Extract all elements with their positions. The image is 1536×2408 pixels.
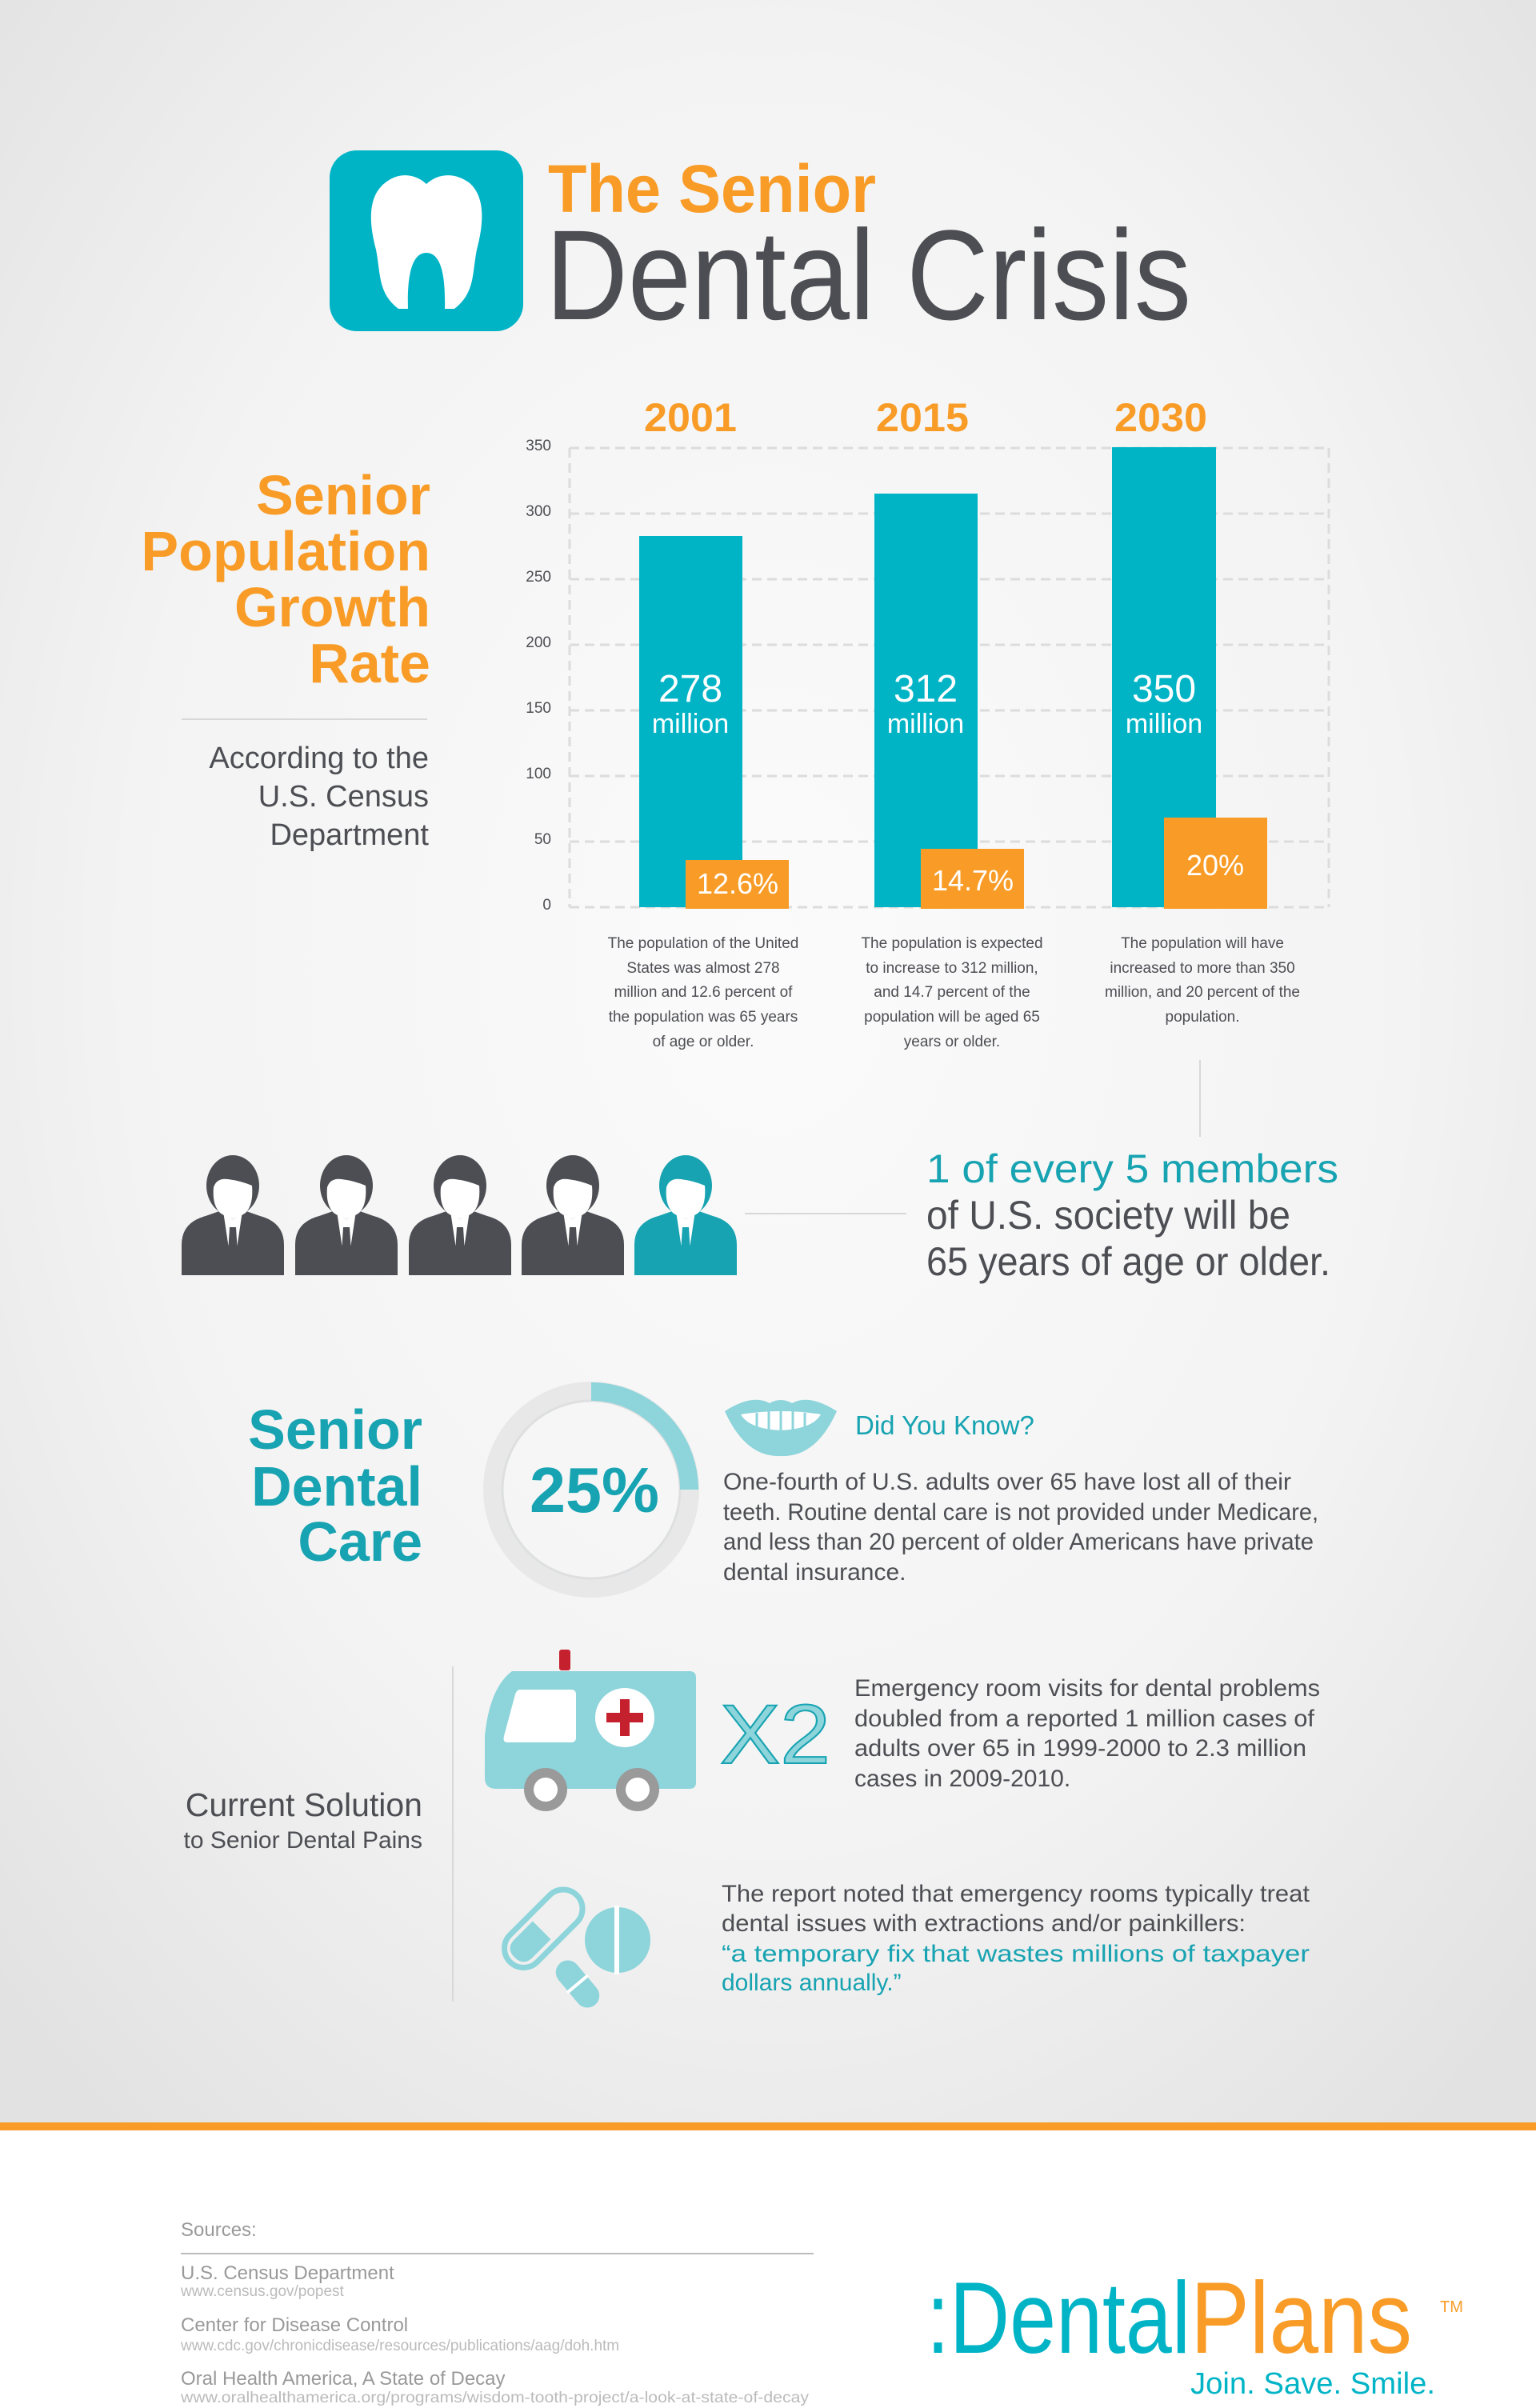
bar chart: 100 [526,766,551,782]
title: The Senior [548,151,876,226]
text: emergency paragraph: cases in 2009-2010. [854,1766,1070,1792]
bar chart: 2001 [644,395,737,440]
text: bar descriptions: million, and 20 percent of the [1105,984,1300,1001]
text: emergency paragraph: doubled from a reported 1 million cases of [854,1706,1315,1732]
heading: senior dental care: Dental [251,1455,422,1518]
text: did you know paragraph: One-fourth of U.S. adults over 65 have lost all of their [723,1469,1291,1495]
donut chart 25%: 25% [530,1454,659,1526]
donut chart 25% [493,1382,698,1588]
heading: senior population growth rate: Rate [309,632,430,694]
bar chart: 2015 [876,395,969,440]
heading: senior population growth rate [141,464,430,694]
callout: 1 of every 5: of U.S. society will be [926,1193,1290,1238]
text: according to census: According to the [209,742,429,775]
text: bar descriptions: and 14.7 percent of the [874,984,1030,1001]
sources: Oral Health America, A State of Decay [181,2368,506,2390]
bar chart: 14.7% [932,864,1014,897]
heading: senior population growth rate: Growth [234,576,430,638]
bar chart: 20% [1186,849,1244,882]
sources [180,2219,814,2406]
bar chart: million [652,709,729,739]
orange divider bar [0,2122,1536,2130]
heading: senior population growth rate: Senior [256,464,430,526]
text: report paragraph: dental issues with extractions and/or painkillers: [722,1910,1246,1937]
text: emergency paragraph: adults over 65 in 1999-2000 to 2.3 million [854,1735,1306,1762]
bar chart: 350 [526,438,551,454]
text: emergency paragraph [854,1675,1320,1792]
logo: DentalPlans: Join. Save. Smile. [1190,2367,1435,2401]
text: bar descriptions: population will be aged 65 [864,1009,1040,1026]
text: according to census: Department [270,818,429,852]
bar chart: 300 [526,503,551,520]
callout: 1 of every 5: 1 of every 5 members [926,1146,1338,1191]
bar chart: 200 [526,634,551,651]
bar chart: 12.6% [697,867,778,900]
text: report paragraph: The report noted that emergency rooms typically treat [722,1881,1310,1907]
title [546,151,1191,346]
bar chart: 250 [526,569,551,586]
heading: senior dental care: Senior [248,1398,422,1461]
heading: current solution: Current Solution [186,1786,422,1823]
callout: 1 of every 5: 65 years of age or older. [926,1239,1330,1284]
text: bar descriptions: million and 12.6 percent of [614,984,793,1001]
icon: smile lips [725,1400,837,1456]
sources: www.oralhealthamerica.org/programs/wisdom-tooth-project/a-look-at-state-of-decay [180,2390,810,2406]
text: did you know paragraph: dental insurance. [723,1559,906,1586]
text: bar descriptions: years or older. [904,1034,1000,1050]
text: bar descriptions: to increase to 312 million, [866,960,1038,977]
bar chart: 50 [534,831,551,848]
logo: DentalPlans [926,2261,1463,2401]
text: bar descriptions: States was almost 278 [626,960,780,977]
text: did you know paragraph: and less than 20 percent of older Americans have private [723,1529,1314,1555]
heading: did you know: Did You Know? [855,1410,1034,1440]
bar chart [526,395,1329,914]
bar chart: million [887,709,964,739]
text: bar descriptions: population. [1166,1009,1239,1026]
bar chart: million [1126,709,1202,739]
icon: pills [497,1882,650,2014]
text: X2: X2 [720,1688,830,1782]
heading: senior dental care [248,1398,422,1573]
text: did you know paragraph [723,1469,1318,1586]
bar chart: 150 [526,700,551,717]
heading: senior dental care: Care [298,1510,422,1573]
sources: www.cdc.gov/chronicdisease/resources/publications/aag/doh.htm [180,2338,619,2354]
heading: senior population growth rate: Population [141,520,430,582]
bar chart: 278 [658,668,722,710]
icon: tooth logo [330,150,523,331]
sources: www.census.gov/popest [180,2283,345,2300]
text: report paragraph: “a temporary fix that wastes millions of taxpayer [722,1941,1310,1967]
text: emergency paragraph: Emergency room visits for dental problems [854,1675,1320,1702]
icon: people row [182,1155,737,1275]
text: bar descriptions: the population was 65 years [609,1009,798,1026]
text: bar descriptions [608,935,1300,1050]
text: bar descriptions: increased to more than 350 [1110,960,1295,977]
text: bar descriptions: The population will have [1121,935,1284,952]
icon: ambulance [485,1650,696,1811]
text: according to census [209,742,429,852]
bar chart: 350 [1132,668,1196,710]
bar chart: 0 [542,897,551,914]
heading: current solution [183,1786,422,1854]
title: Dental Crisis [546,203,1191,346]
logo: DentalPlans: TM [1440,2298,1463,2316]
bar chart: 312 [894,668,958,710]
bar chart: 2030 [1114,395,1207,440]
sources: U.S. Census Department [181,2262,394,2284]
text: bar descriptions: of age or older. [653,1034,754,1050]
text: report paragraph: dollars annually.” [722,1970,902,1996]
text: bar descriptions: The population of the United [608,935,798,952]
logo: DentalPlans: :Dental [926,2261,1190,2374]
logo: DentalPlans: Plans [1190,2261,1412,2374]
heading: current solution: to Senior Dental Pains [183,1827,422,1854]
sources: Sources: [181,2219,257,2241]
text: according to census: U.S. Census [258,780,429,814]
sources: Center for Disease Control [181,2314,408,2336]
text: report paragraph [722,1881,1310,1996]
text: bar descriptions: The population is expected [861,935,1043,952]
text: did you know paragraph: teeth. Routine dental care is not provided under Medicare, [723,1499,1318,1526]
callout: 1 of every 5 [926,1146,1338,1284]
